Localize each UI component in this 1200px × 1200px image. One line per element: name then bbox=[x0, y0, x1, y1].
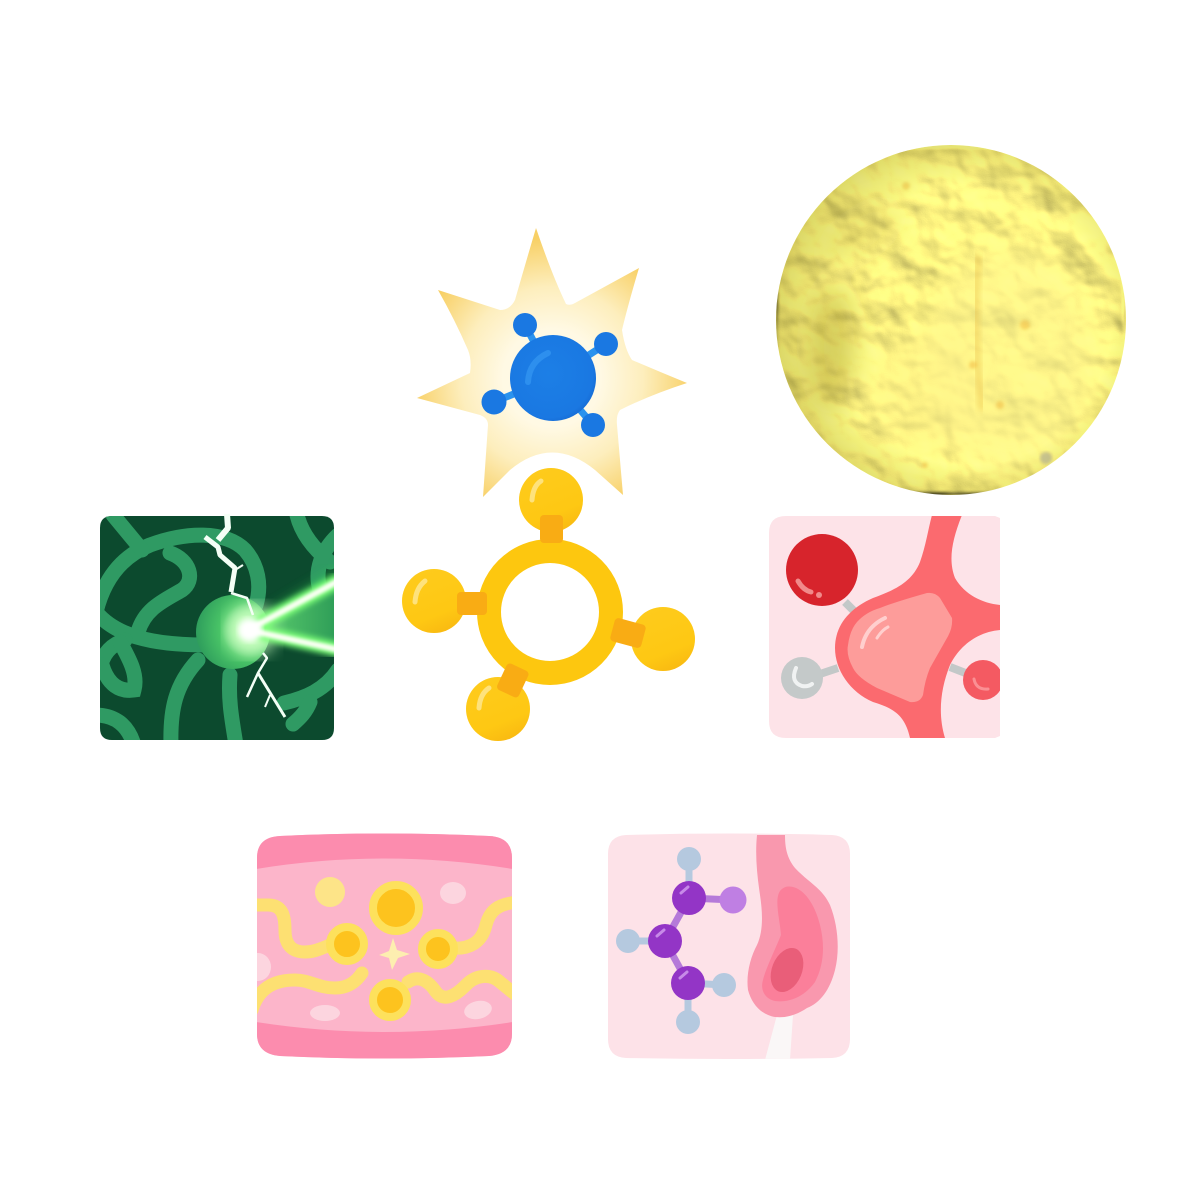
laser wedge bbox=[269, 590, 334, 644]
yellow particles bbox=[330, 885, 454, 1017]
starburst bbox=[417, 228, 687, 497]
bonds bbox=[817, 602, 968, 675]
red atom bbox=[786, 534, 858, 606]
icon: yellow powder circle bbox=[776, 145, 1126, 495]
highlight bbox=[528, 353, 548, 382]
connectors bbox=[457, 515, 647, 699]
icon: pink band with yellow particles bbox=[245, 830, 518, 1062]
spark bbox=[379, 938, 410, 970]
blobs bbox=[315, 877, 345, 907]
icon: pink tissue with red molecules bbox=[769, 515, 1003, 738]
coral atom bbox=[963, 660, 1003, 700]
cell highlights bbox=[862, 618, 888, 647]
inner cell bbox=[762, 886, 823, 1001]
core bbox=[510, 335, 596, 421]
nucleus bbox=[770, 948, 804, 992]
atom highlights bbox=[657, 887, 688, 978]
light atoms bbox=[616, 847, 736, 1034]
bonds bbox=[494, 325, 606, 425]
nodes bbox=[482, 313, 618, 437]
bonds bbox=[640, 870, 713, 1010]
cracks bbox=[205, 514, 285, 717]
grey atom bbox=[781, 657, 823, 699]
fibres bbox=[95, 515, 338, 745]
wavy lines bbox=[250, 902, 518, 1010]
icon: yellow ring molecule bbox=[402, 468, 695, 741]
balls bbox=[519, 468, 583, 532]
white strip bbox=[765, 1015, 793, 1060]
cell membrane bbox=[835, 515, 1000, 738]
laser beams bbox=[248, 580, 340, 650]
pink cell bbox=[747, 835, 838, 1017]
highlights bbox=[415, 481, 541, 708]
icon: purple molecule with pink cell bbox=[608, 830, 850, 1062]
cell body bbox=[848, 593, 952, 702]
purple atoms bbox=[648, 881, 706, 1000]
node bbox=[196, 595, 270, 669]
icon: blue molecule with starburst bbox=[417, 228, 687, 497]
ring bbox=[489, 551, 611, 673]
icon: green fibres with laser bbox=[95, 514, 345, 745]
laser glow bbox=[263, 568, 334, 612]
bottom band bbox=[256, 1022, 513, 1062]
top band bbox=[256, 830, 513, 869]
